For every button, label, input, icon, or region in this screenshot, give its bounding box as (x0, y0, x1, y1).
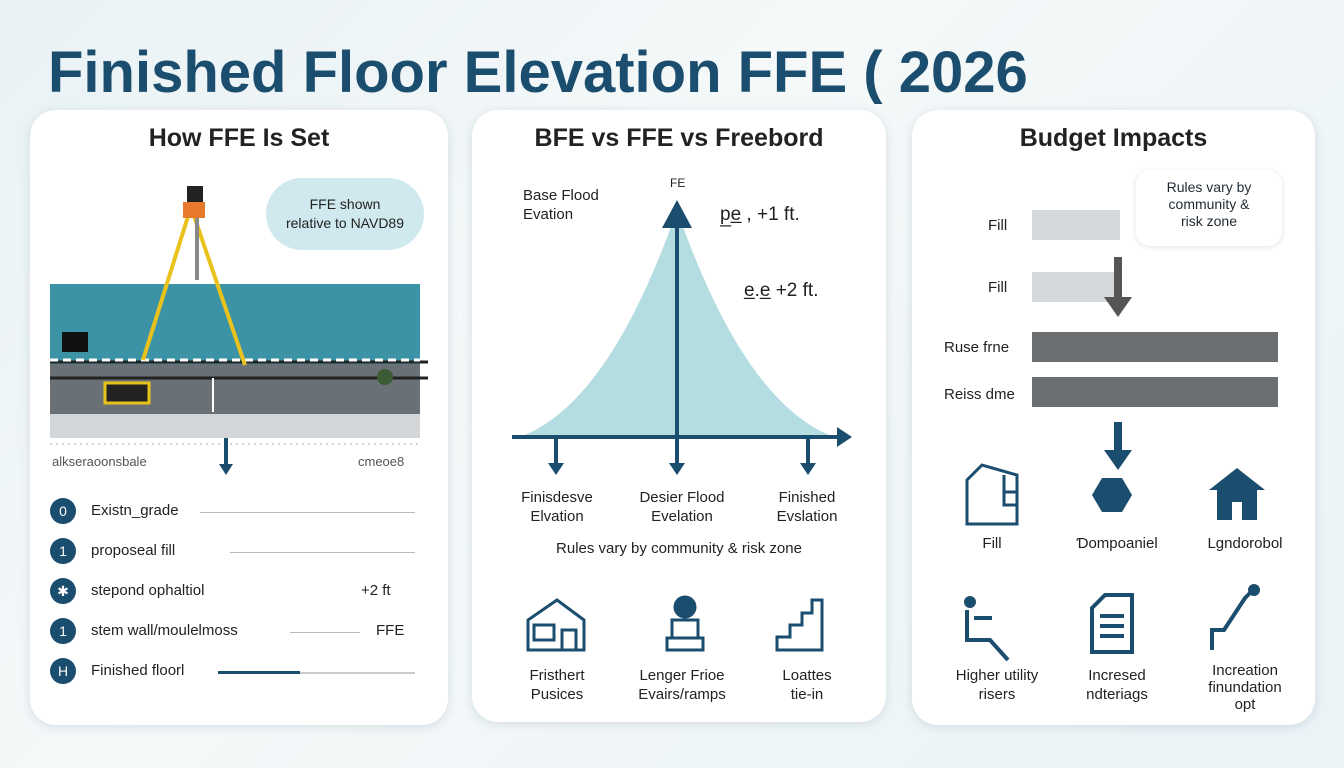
bar chart: Fill (988, 279, 1007, 296)
arrow (1104, 422, 1132, 470)
site section diagram (50, 186, 428, 475)
panel: how FFE is set: cmeoe8 (358, 454, 404, 469)
panel: budget impacts: ndteriags (1086, 686, 1148, 703)
panel: budget impacts (912, 110, 1315, 725)
icon captions (529, 667, 584, 703)
legend list: stem wall/moulelmoss (91, 622, 238, 639)
panel: BFE vs FFE vs Freeboard: Evslation (777, 508, 837, 525)
panel: BFE vs FFE vs Freeboard: Finished (779, 489, 835, 506)
axis labels: Elvation (530, 508, 584, 525)
bar chart: Fill (988, 217, 1007, 234)
panel: budget impacts: risers (979, 686, 1015, 703)
legend list (50, 498, 415, 684)
axis labels: Finisdesve (521, 489, 593, 506)
callout: risk zone (1181, 213, 1237, 229)
panel: budget impacts: Fill (982, 535, 1002, 552)
callout (1136, 170, 1282, 246)
heading: Budget Impacts (1020, 124, 1207, 152)
panel: budget impacts: Incresed (1088, 667, 1146, 684)
callout: relative to NAVD89 (286, 215, 404, 231)
freeboard labels: p̲e̲ , +1 ft. (720, 204, 800, 225)
panel: BFE vs FFE vs Freeboard: Lenger Frioe (639, 667, 725, 684)
bar chart: Ruse frne (944, 339, 1009, 356)
note: Rules vary by community & risk zone (556, 540, 802, 557)
legend list: stepond ophaltiol (91, 582, 204, 599)
panel: BFE vs FFE vs Freeboard: Loattes (782, 667, 832, 684)
panel: budget impacts: Lgndorobol (1207, 535, 1283, 552)
panel: BFE vs FFE vs Freeboard (472, 110, 886, 722)
callout (266, 178, 424, 250)
panel: how FFE is set (30, 110, 448, 725)
legend list: ✱ (57, 583, 69, 599)
panel: budget impacts: finundation (1208, 679, 1282, 696)
callout: FFE shown (310, 196, 380, 212)
legend list: Finished floorl (91, 662, 184, 679)
legend list: Existn_grade (91, 502, 179, 519)
legend list: FFE (376, 622, 404, 639)
icon captions: Fristhert (529, 667, 584, 684)
panel: budget impacts: Increation (1212, 662, 1278, 679)
label: base flood elevation: Base Flood (523, 187, 599, 204)
label: base flood elevation (523, 187, 599, 223)
panel: budget impacts: opt (1235, 696, 1255, 713)
panel: budget impacts: Ɗompoaniel (1076, 535, 1158, 552)
callout: Rules vary by (1167, 179, 1251, 195)
icon captions: Pusices (531, 686, 583, 703)
legend list: 0 (59, 503, 67, 519)
bar chart (944, 210, 1278, 407)
icons row (526, 596, 824, 652)
legend list: 1 (59, 543, 67, 559)
icon grid (964, 463, 1265, 662)
axis labels (521, 489, 593, 525)
legend list: 1 (59, 623, 67, 639)
heading: How FFE Is Set (149, 124, 329, 152)
panel: BFE vs FFE vs Freeboard: Evairs/ramps (638, 686, 726, 703)
panel: BFE vs FFE vs Freeboard: Evelation (651, 508, 713, 525)
legend list: +2 ft (361, 582, 391, 599)
panel: BFE vs FFE vs Freeboard: e̲.e̲ +2 ft. (744, 280, 818, 301)
legend list: proposeal fill (91, 542, 175, 559)
panel: BFE vs FFE vs Freeboard: tie-in (791, 686, 823, 703)
label: base flood elevation: Evation (523, 206, 573, 223)
bar chart: Reiss dme (944, 386, 1015, 403)
panel: BFE vs FFE vs Freeboard: FE (670, 176, 685, 190)
legend list: H (58, 663, 68, 679)
scale labels: alkseraoonsbale (52, 454, 147, 469)
callout: community & (1169, 196, 1249, 212)
title: Finished Floor Elevation FFE ( 2026 (48, 40, 1028, 105)
heading: BFE vs FFE vs Freebord (535, 124, 823, 152)
panel: budget impacts: Higher utility (956, 667, 1038, 684)
chart (512, 200, 852, 475)
panel: BFE vs FFE vs Freeboard: Desier Flood (639, 489, 725, 506)
